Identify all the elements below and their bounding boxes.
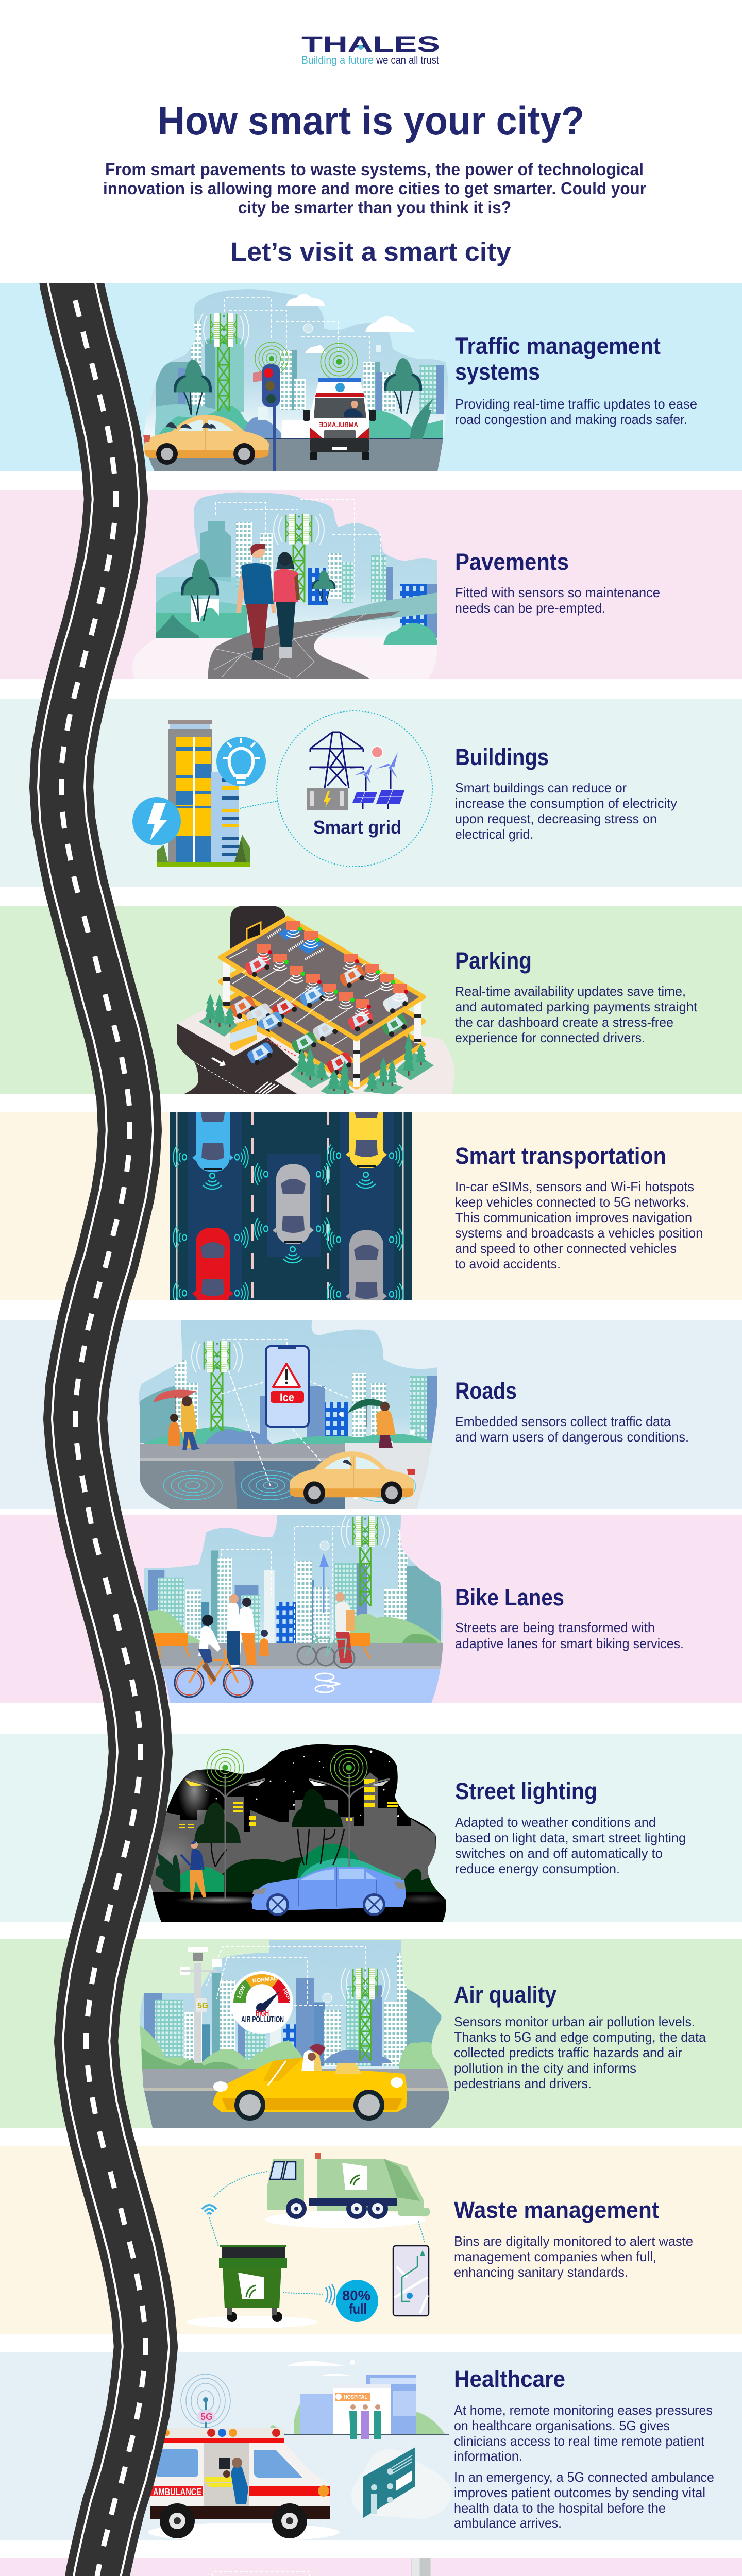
body text: increase the consumption of electricity <box>455 795 677 811</box>
illustration: office building <box>132 711 432 867</box>
icon: yellow car <box>290 1451 415 1504</box>
body text <box>455 1620 684 1651</box>
heading: Smart transportation <box>455 1143 666 1169</box>
body text: based on light data, smart street lighting <box>455 1830 686 1845</box>
wireless signals <box>173 1145 403 1305</box>
body text <box>455 984 698 1045</box>
icon: light bulb <box>216 737 266 786</box>
panel: street lighting <box>0 1734 742 1924</box>
icon: smartphone ice alert: Ice <box>280 1391 294 1404</box>
heading: Pavements <box>455 549 569 575</box>
body text <box>454 2402 714 2531</box>
icon: patient data display <box>363 2447 415 2518</box>
heading: Waste management <box>454 2197 659 2223</box>
panel: parking <box>0 906 742 1097</box>
body text: the car dashboard create a stress-free <box>455 1014 673 1030</box>
body text: enhancing sanitary standards. <box>454 2264 628 2280</box>
icon: walking couple <box>236 544 300 660</box>
intro text <box>103 160 646 217</box>
dotted link <box>240 801 277 808</box>
body text: and automated parking payments straight <box>455 999 698 1014</box>
heading: Parking <box>455 947 532 974</box>
icon: lightning bolt <box>132 797 181 845</box>
icon: cyclist <box>175 1615 252 1697</box>
heading: Traffic management <box>455 333 661 359</box>
heading line 2: systems <box>455 359 540 385</box>
icon: wind turbines and solar panels <box>352 752 404 809</box>
illustration: connected cars on road <box>170 1112 412 1300</box>
people with umbrellas <box>154 1390 396 1450</box>
gauge: air pollution: NORMAL <box>252 1976 278 1985</box>
icon: phone with map <box>393 2246 429 2316</box>
body text: collected predicts traffic hazards and air <box>454 2045 682 2060</box>
intro text: From smart pavements to waste systems, the power of technological <box>105 160 644 179</box>
gauge: air pollution: HIGH <box>281 1987 294 2003</box>
body text: and speed to other connected vehicles <box>455 1241 677 1256</box>
illustration: smart meter and pipes <box>134 2558 453 2576</box>
body text <box>455 780 677 842</box>
icon: yellow convertible <box>213 2044 407 2121</box>
icon: ambulance front: AMBULANCE <box>319 421 358 429</box>
gauge: air pollution: AIR POLLUTION <box>241 2014 284 2024</box>
illustration: hospital and ambulance <box>148 2360 451 2541</box>
icon: 5G mast <box>181 2374 230 2429</box>
body text: This communication improves navigation <box>455 1210 692 1225</box>
icon: pylon <box>310 732 363 788</box>
badge: 80 percent full: 80% <box>342 2287 370 2303</box>
illustration: walking couple <box>129 490 443 681</box>
heading: Street lighting <box>455 1778 597 1804</box>
body text: Smart buildings can reduce or <box>455 780 627 795</box>
icon: blue car <box>251 1867 406 1916</box>
body text: needs can be pre-empted. <box>455 600 605 616</box>
icon: bike lane marking <box>315 1673 340 1692</box>
icon: green bin <box>219 2245 287 2322</box>
illustration: traffic scene <box>139 286 453 472</box>
heading: Buildings <box>455 744 549 770</box>
icon: yellow car <box>143 415 269 465</box>
icon: wifi <box>202 2205 216 2214</box>
title: How smart is your city? <box>158 98 584 143</box>
panel: roads <box>0 1320 742 1511</box>
body text: Fitted with sensors so maintenance <box>455 585 660 600</box>
body text: systems and broadcasts a vehicles position <box>455 1225 703 1241</box>
body text: reduce energy consumption. <box>455 1861 620 1876</box>
icon: sensor pole <box>180 1947 222 2063</box>
panel: healthcare <box>0 2352 742 2541</box>
intro text: city be smarter than you think it is? <box>238 198 511 217</box>
entrance <box>247 922 261 940</box>
body text: on healthcare organisations. 5G gives <box>454 2418 670 2433</box>
icon: paramedic and patient <box>205 2458 248 2504</box>
body text: experience for connected drivers. <box>455 1030 645 1045</box>
icon: dark trees <box>194 1789 344 1867</box>
parking booth <box>230 1018 271 1051</box>
body text: Embedded sensors collect traffic data <box>455 1414 671 1429</box>
gauge: air pollution <box>230 1971 294 2034</box>
sensor signals <box>256 929 407 1016</box>
icon: docked bikes <box>297 1634 355 1668</box>
trees <box>199 994 434 1097</box>
body text: Bins are digitally monitored to alert waste <box>454 2233 693 2249</box>
smart grid circle <box>277 711 432 867</box>
body text: Thanks to 5G and edge computing, the data <box>454 2029 706 2045</box>
icon: hospital: HOSPITAL <box>344 2394 367 2400</box>
body text: pollution in the city and informs <box>454 2060 636 2076</box>
panel: waste management <box>0 2146 742 2334</box>
panel: resource management <box>0 2558 742 2576</box>
snow <box>339 1412 424 1499</box>
heading: Bike Lanes <box>455 1584 564 1611</box>
body text: pedestrians and drivers. <box>454 2076 592 2091</box>
body text <box>455 1815 686 1876</box>
body text: Real-time availability updates save time, <box>455 984 686 999</box>
body text: electrical grid. <box>455 826 533 842</box>
icon: ambulance side <box>150 2428 330 2538</box>
icon: sensor pole: 5G <box>197 2002 208 2010</box>
illustration: smart bins <box>187 2153 430 2328</box>
sensor signs <box>257 921 407 1008</box>
panel: buildings <box>0 699 742 887</box>
body text: Adapted to weather conditions and <box>455 1815 656 1830</box>
icon: 5G mast: 5G <box>200 2412 213 2422</box>
header logo: we can all trust <box>376 54 439 66</box>
lower deck <box>222 993 426 1090</box>
intro text: innovation is allowing more and more cities to get smarter. Could your <box>103 179 646 198</box>
icon: ambulance side: AMBULANCE <box>153 2487 201 2497</box>
body text: Streets are being transformed with <box>455 1620 655 1635</box>
illustration: multi-storey car park <box>177 906 455 1097</box>
body text <box>455 1414 689 1445</box>
body text: road congestion and making roads safer. <box>455 412 687 427</box>
badge: 80 percent full <box>336 2280 378 2322</box>
icon: pedestrian <box>181 1841 206 1900</box>
body text: At home, remote monitoring eases pressures <box>454 2402 713 2418</box>
body text <box>454 2233 693 2280</box>
icon: transformer box <box>307 788 348 810</box>
header logo <box>301 32 440 66</box>
heading: Roads <box>455 1378 517 1404</box>
body text: adaptive lanes for smart biking services. <box>455 1636 684 1651</box>
body text <box>455 585 660 616</box>
header logo: THALES <box>301 32 440 57</box>
body text: In-car eSIMs, sensors and Wi-Fi hotspots <box>455 1179 694 1194</box>
icon: people walking <box>227 1592 355 1667</box>
middle deck <box>218 970 426 1063</box>
sensor ripples <box>163 1471 416 1502</box>
body text <box>454 2014 706 2091</box>
body text: upon request, decreasing stress on <box>455 811 657 826</box>
header logo: Building a future <box>301 54 374 66</box>
body text <box>455 396 697 427</box>
icon: pipe and valve <box>308 2558 421 2576</box>
body text: switches on and off automatically to <box>455 1845 663 1861</box>
badge: 80 percent full: full <box>349 2301 367 2317</box>
ramp tower <box>230 906 285 949</box>
body text: information. <box>454 2448 522 2464</box>
body text: Sensors monitor urban air pollution levels. <box>454 2014 695 2029</box>
sensor status lights <box>268 927 408 1009</box>
body text: Providing real-time traffic updates to ease <box>455 396 697 412</box>
label: smart grid: Smart grid <box>313 817 401 838</box>
heading: Air quality <box>454 1981 556 2008</box>
icon: signal <box>326 2284 335 2305</box>
illustration: road sensors and ice warning <box>134 1320 443 1511</box>
body text: and warn users of dangerous conditions. <box>455 1429 689 1445</box>
body text: management companies when full, <box>454 2249 656 2264</box>
top deck <box>221 918 424 1039</box>
heading: Healthcare <box>454 2366 565 2392</box>
panel: smart transportation <box>0 1112 742 1300</box>
barrier <box>267 1040 296 1056</box>
bushes <box>156 1844 440 1892</box>
gauge: air pollution: HIGH <box>256 2008 269 2018</box>
body text: health data to the hospital before the <box>454 2500 666 2516</box>
ground and road <box>177 999 455 1094</box>
winding road <box>61 268 146 2576</box>
body text: to avoid accidents. <box>455 1256 561 1272</box>
panel: bike lanes <box>0 1515 742 1705</box>
panel: air quality <box>0 1937 742 2130</box>
body text <box>455 1179 703 1272</box>
illustration: bike lane street <box>139 1515 448 1705</box>
body text: ambulance arrives. <box>454 2515 562 2531</box>
dotted route <box>209 2172 425 2294</box>
body text: keep vehicles connected to 5G networks. <box>455 1194 689 1210</box>
subheading: Let’s visit a smart city <box>230 237 512 266</box>
panel: pavements <box>0 490 742 681</box>
illustration: air pollution monitor <box>134 1937 453 2130</box>
icon: garbage truck <box>267 2153 430 2219</box>
gauge: air pollution: LOW <box>236 1985 247 1999</box>
icon: ambulance front <box>303 378 376 460</box>
illustration: night street <box>139 1744 456 1924</box>
icon: smartphone ice alert <box>266 1346 309 1427</box>
panel: traffic management <box>0 283 742 472</box>
icon: street lamps <box>185 1775 390 1901</box>
body text: clinicians access to real time remote patient <box>454 2433 705 2449</box>
icon: hospital <box>268 2375 449 2439</box>
body text: improves patient outcomes by sending vital <box>454 2485 705 2500</box>
icon: traffic light <box>253 364 280 471</box>
body text: In an emergency, a 5G connected ambulance <box>454 2469 714 2485</box>
